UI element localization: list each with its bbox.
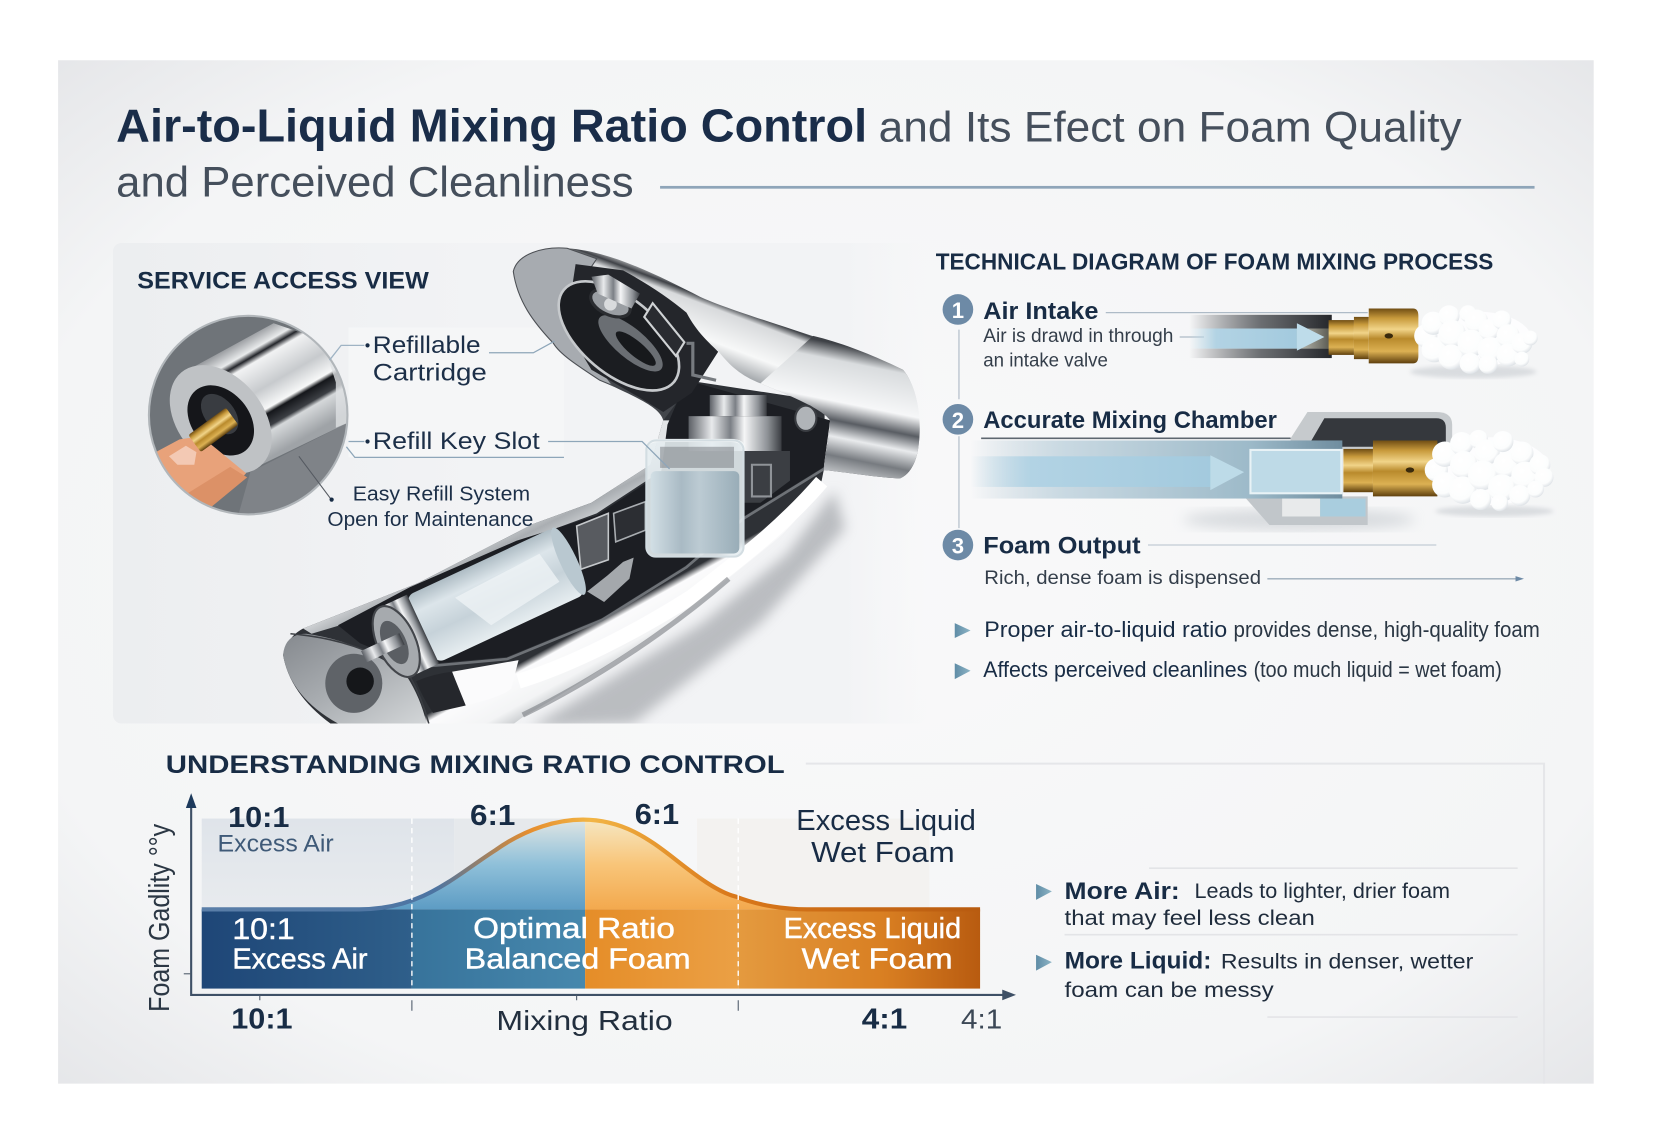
heading: service access view: SERVICE ACCESS VIEW <box>137 267 429 294</box>
step 2: mixing chamber: 2 <box>952 408 964 433</box>
chart: foam quality vs mixing ratio: 6:1 <box>470 800 516 832</box>
diagram: air intake nozzle <box>1189 305 1538 378</box>
title <box>116 100 1463 205</box>
note: more liquid: More Liquid: <box>1065 948 1211 975</box>
callouts: refillable cartridge and key slot <box>330 332 670 469</box>
chart: foam quality vs mixing ratio: 10:1 <box>228 802 290 834</box>
chart: foam quality vs mixing ratio: Excess Air <box>232 944 368 976</box>
step 3: foam output: Rich, dense foam is dispensed <box>984 568 1261 589</box>
chart: foam quality vs mixing ratio: 10:1 <box>231 1004 293 1036</box>
chart: foam quality vs mixing ratio: Mixing Ratio <box>496 1005 673 1036</box>
note: more liquid: Results in denser, wetter <box>1221 949 1473 974</box>
chart: foam quality vs mixing ratio: Wet Foam <box>811 837 955 869</box>
bullet: perceived cleanliness: (too much liquid = wet foam) <box>1254 657 1502 682</box>
note: more air: More Air: <box>1065 878 1180 905</box>
inset: refill key close-up <box>148 314 348 516</box>
bullet: proper ratio <box>955 617 1540 642</box>
panel: understanding mixing ratio control <box>144 751 1544 1084</box>
note: more liquid <box>1036 948 1473 1002</box>
chart: foam quality vs mixing ratio: 10:1 <box>232 913 295 946</box>
heading: mixing ratio: UNDERSTANDING MIXING RATIO CONTROL <box>166 751 785 779</box>
step 3: foam output: Foam Output <box>983 532 1141 559</box>
step 1: air intake: 1 <box>952 298 964 323</box>
chart: foam quality vs mixing ratio: 6:1 <box>635 799 679 831</box>
title: and Perceived Cleanliness <box>116 158 634 205</box>
callouts: refillable cartridge and key slot: Cartridge <box>373 359 487 386</box>
step 3: foam output: 3 <box>952 533 964 558</box>
chart: foam quality vs mixing ratio: Excess Liquid <box>796 805 976 837</box>
step 2: mixing chamber: Accurate Mixing Chamber <box>983 407 1277 434</box>
chart: foam quality vs mixing ratio: Balanced Foam <box>465 944 691 976</box>
bullet: proper ratio: provides dense, high-quality foam <box>1234 617 1540 642</box>
chart: foam quality vs mixing ratio <box>144 793 1016 1036</box>
step 1: air intake: Air Intake <box>983 298 1098 325</box>
note: more air: that may feel less clean <box>1065 905 1315 930</box>
callouts: refillable cartridge and key slot: Refill Key Slot <box>373 428 540 455</box>
callouts: refillable cartridge and key slot: Refillable <box>373 332 481 359</box>
step 3: foam output <box>943 530 1524 589</box>
chart: foam quality vs mixing ratio: 4:1 <box>961 1004 1002 1035</box>
upper arm chrome shell <box>568 248 920 478</box>
glass cartridge <box>361 528 586 678</box>
step 1: air intake: an intake valve <box>983 351 1108 372</box>
bullet: perceived cleanliness <box>955 657 1502 682</box>
panel: technical diagram <box>936 248 1554 682</box>
callout: easy refill system: Easy Refill System <box>353 483 530 506</box>
step 1: air intake: Air is drawd in through <box>983 326 1173 347</box>
chart: foam quality vs mixing ratio: Excess Air <box>218 830 334 857</box>
metal valve cylinders <box>710 395 767 416</box>
callout: easy refill system: Open for Maintenance <box>327 508 533 531</box>
chart: foam quality vs mixing ratio: Wet Foam <box>802 944 953 976</box>
callout: easy refill system <box>299 456 533 531</box>
note: more air <box>1036 868 1518 1017</box>
glass refill cup <box>646 440 744 557</box>
chart: foam quality vs mixing ratio: Optimal Ratio <box>473 913 675 945</box>
bullet: proper ratio: Proper air-to-liquid ratio <box>984 617 1227 642</box>
chart: foam quality vs mixing ratio: Excess Liquid <box>784 913 961 945</box>
control buttons in cavity <box>577 513 608 569</box>
note: more air: Leads to lighter, drier foam <box>1194 878 1450 903</box>
diagram: mixing chamber <box>971 412 1554 530</box>
bullet: perceived cleanliness: Affects perceived cleanlines <box>983 657 1247 682</box>
title: and Its Efect on Foam Quality <box>879 104 1463 151</box>
title: Air-to-Liquid Mixing Ratio Control <box>116 100 867 152</box>
illustration: opened foam dispenser <box>283 248 920 729</box>
note: more liquid: foam can be messy <box>1065 977 1274 1002</box>
step 1: air intake <box>943 294 1368 372</box>
panel: service access view <box>113 243 926 729</box>
chart: foam quality vs mixing ratio: Foam Gadlity °°y <box>144 823 176 1012</box>
heading: technical diagram: TECHNICAL DIAGRAM OF FOAM MIXING PROCESS <box>936 248 1493 274</box>
chart: foam quality vs mixing ratio: 4:1 <box>862 1004 907 1036</box>
